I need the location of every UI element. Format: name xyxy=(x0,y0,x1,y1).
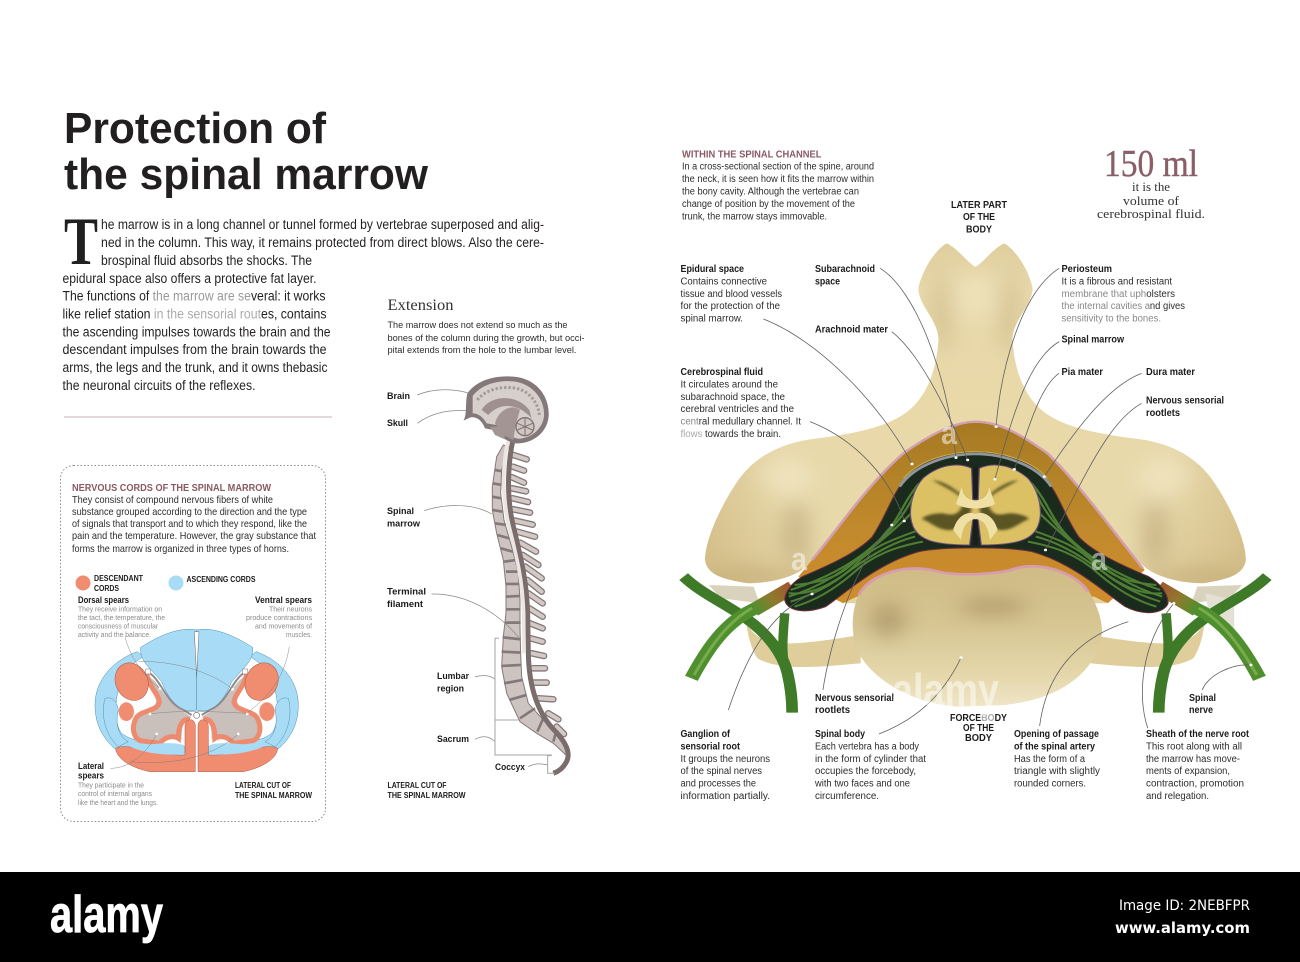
legend: ASCENDING CORDS xyxy=(186,575,256,584)
website: www.alamy.com xyxy=(1115,919,1250,937)
label: cerebrospinal fluid: flows towards the brain. xyxy=(680,429,781,440)
within the spinal channel text: the bony cavity. Although the vertebrae can xyxy=(682,186,859,198)
callout: 150 ml: volume of xyxy=(1123,193,1180,208)
intro text block: he marrow is in a long channel or tunnel formed by vertebrae superposed and alig- xyxy=(101,217,544,232)
label: lateral spears: spears xyxy=(78,770,104,780)
label: ganglion of sensorial root: and processes the xyxy=(680,778,756,790)
watermark over illustration: a xyxy=(791,541,807,577)
label: cerebrospinal fluid: central medullary channel. It xyxy=(680,416,801,428)
label: spinal marrow: Spinal marrow xyxy=(1062,334,1124,346)
spine labels: Lumbar xyxy=(437,671,469,682)
labels: left column upper xyxy=(680,264,782,324)
spine leader lines xyxy=(417,390,555,773)
label: spinal nerve: Spinal xyxy=(1189,693,1216,704)
spine caption xyxy=(388,781,466,800)
label: dorsal spears: consciousness of muscular xyxy=(78,624,159,630)
label: arachnoid mater: Arachnoid mater xyxy=(815,324,888,336)
spine labels: Spinal xyxy=(387,506,414,517)
label: nervous sensorial rootlets right: Nervous sensorial xyxy=(1146,396,1224,406)
label: sheath of the nerve root xyxy=(1146,729,1250,802)
watermark over illustration: a xyxy=(1091,541,1107,577)
label: periosteum: membrane that upholsters xyxy=(1062,289,1175,300)
label: ganglion of sensorial root xyxy=(680,729,770,802)
callout: 150 ml xyxy=(1097,143,1205,221)
watermark over illustration: a xyxy=(941,415,957,451)
bone shading xyxy=(705,273,1246,586)
label: spinal body: circumference. xyxy=(815,791,879,802)
label: lateral spears: They participate in the xyxy=(78,782,144,790)
watermark over illustration xyxy=(791,415,1107,716)
label: forcebody of the body xyxy=(950,713,1007,744)
spine labels: Sacrum xyxy=(437,734,469,745)
vertebral column xyxy=(492,445,568,755)
illustration: vertebra cross-section xyxy=(684,243,1267,734)
labels: left column upper: Contains connective xyxy=(680,276,767,288)
label: ganglion of sensorial root: of the spinal nerves xyxy=(680,766,762,777)
spinal nerves xyxy=(684,577,1267,713)
bone: lamina, transverse and spinous processes xyxy=(705,243,1246,603)
label: dorsal spears: activity and the balance. xyxy=(78,632,151,639)
legend: DESCENDANT xyxy=(94,574,143,583)
panel description: substance grouped according to the direction and the type xyxy=(72,506,307,518)
panel heading: NERVOUS CORDS OF THE SPINAL MARROW xyxy=(72,483,272,494)
legend: CORDS xyxy=(94,584,120,593)
intro text block: descendant impulses from the brain towards the xyxy=(62,342,326,357)
later part of the body label: LATER PART xyxy=(951,200,1007,211)
label: opening of passage of the spinal artery: triangle with slightly xyxy=(1014,766,1100,777)
central commissure xyxy=(956,487,995,508)
spine labels: Terminal xyxy=(387,586,426,598)
label: cerebrospinal fluid: It circulates around the xyxy=(680,380,778,390)
label: spinal nerve: nerve xyxy=(1189,705,1213,716)
spine labels: filament xyxy=(387,599,424,610)
arachnoid layers xyxy=(900,454,1051,487)
intro text block: The functions of the marrow are several: it works xyxy=(62,288,326,304)
label: lateral spears: control of internal organs xyxy=(78,791,152,798)
intro text block: T xyxy=(64,203,98,279)
label: spinal body: occupies the forcebody, xyxy=(815,766,916,777)
title: the spinal marrow xyxy=(64,150,429,199)
label: sheath of the nerve root: ments of expansion, xyxy=(1146,766,1230,777)
labels: left column upper: Epidural space xyxy=(680,264,744,275)
label: ventral spears: produce contractions xyxy=(246,615,313,622)
spinal cord xyxy=(504,438,568,773)
label: cerebrospinal fluid: cerebral ventricles and the xyxy=(680,404,794,415)
label: subarachnoid space: Subarachnoid xyxy=(815,264,875,275)
intro text block: ned in the column. This way, it remains protected from direct blows. Also the cere- xyxy=(101,235,544,250)
label: dorsal spears: Dorsal spears xyxy=(78,595,129,605)
label: spinal body: Spinal body xyxy=(815,729,865,740)
label: spinal body: Each vertebra has a body xyxy=(815,742,919,752)
extension text block: Extension xyxy=(388,297,454,314)
label: spinal body xyxy=(814,729,926,802)
label: cerebrospinal fluid: Cerebrospinal fluid xyxy=(680,367,763,378)
label: lateral spears: like the heart and the lungs. xyxy=(78,800,158,807)
panel description: pain and the temperature. However, the gray substance that xyxy=(72,530,316,542)
title: Protection of xyxy=(64,104,326,153)
cross-section diagram xyxy=(95,629,298,772)
legend xyxy=(76,574,256,593)
label: sheath of the nerve root: the marrow has move- xyxy=(1146,754,1240,765)
intro text block: arms, the legs and the trunk, and it owns thebasic xyxy=(62,360,328,375)
label: subarachnoid space: space xyxy=(815,276,840,288)
label: nervous sensorial rootlets lower: rootlets xyxy=(815,705,850,716)
dura outline xyxy=(812,422,1143,568)
label: ganglion of sensorial root: It groups the neurons xyxy=(680,754,770,765)
later part of the body label: OF THE xyxy=(963,212,995,223)
diagram caption: LATERAL CUT OF xyxy=(235,781,291,790)
label: ganglion of sensorial root: sensorial root xyxy=(680,742,741,752)
label: ventral spears xyxy=(246,595,313,639)
label: ventral spears: and movements of xyxy=(255,624,312,630)
epidural fat xyxy=(798,422,1145,603)
spine labels: Coccyx xyxy=(495,762,526,773)
spine labels: Brain xyxy=(387,391,410,402)
label: nervous sensorial rootlets right: rootlets xyxy=(1146,408,1180,419)
grey matter xyxy=(922,480,1029,530)
labels: left column upper: spinal marrow. xyxy=(680,314,743,324)
callout: 150 ml: cerebrospinal fluid. xyxy=(1097,206,1205,221)
label: forcebody of the body: FORCEBODY xyxy=(950,713,1007,724)
within the spinal channel text: WITHIN THE SPINAL CHANNEL xyxy=(682,150,822,160)
extension text block xyxy=(388,297,584,356)
label: sheath of the nerve root: and relegation. xyxy=(1146,791,1209,802)
label: nervous sensorial rootlets lower xyxy=(815,693,894,716)
intro text block xyxy=(62,203,544,393)
spinous processes xyxy=(512,455,564,734)
label: ganglion of sensorial root: information partially. xyxy=(680,791,770,802)
label: opening of passage of the spinal artery: of the spinal artery xyxy=(1014,742,1095,752)
label: sheath of the nerve root: Sheath of the nerve root xyxy=(1146,729,1250,740)
within the spinal channel text: trunk, the marrow stays immovable. xyxy=(682,212,827,222)
label: spinal body: in the form of cylinder that xyxy=(815,754,926,765)
within the spinal channel text: the neck, it is seen how it fits the marrow within xyxy=(682,174,874,185)
label: dorsal spears: They receive information on xyxy=(78,606,162,614)
panel description: They consist of compound nervous fibers of white xyxy=(72,494,273,506)
body shading xyxy=(870,597,1028,638)
extension text block: The marrow does not extend so much as the xyxy=(388,320,568,331)
nerve rootlets xyxy=(789,483,1162,607)
label: opening of passage of the spinal artery: rounded corners. xyxy=(1014,778,1086,790)
label: ventral spears: Ventral spears xyxy=(255,595,312,605)
label: nervous sensorial rootlets right xyxy=(1146,396,1224,419)
label: spinal nerve xyxy=(1189,693,1216,716)
panel description: forms the marrow is organized in three types of horns. xyxy=(72,543,289,555)
diagram caption: THE SPINAL MARROW xyxy=(235,791,312,800)
label: cerebrospinal fluid: subarachnoid space, the xyxy=(680,392,785,403)
callout: 150 ml: 150 ml xyxy=(1104,143,1198,185)
label: periosteum: Periosteum xyxy=(1062,264,1112,275)
spine labels: Skull xyxy=(387,418,408,429)
panel description xyxy=(72,494,316,555)
later part of the body label xyxy=(951,200,1007,236)
label: periosteum: sensitivity to the bones. xyxy=(1062,314,1161,324)
labels: left column upper: for the protection of the xyxy=(680,301,780,312)
label: periosteum: It is a fibrous and resistant xyxy=(1062,276,1172,288)
spine labels: region xyxy=(437,684,464,694)
leader lines xyxy=(728,268,1251,734)
label: sheath of the nerve root: contraction, promotion xyxy=(1146,778,1244,790)
title xyxy=(64,104,429,199)
extension text block: bones of the column during the growth, but occi- xyxy=(388,333,584,344)
intro text block: the ascending impulses towards the brain and the xyxy=(62,324,330,340)
label: periosteum xyxy=(1062,264,1185,324)
label: pia mater: Pia mater xyxy=(1062,367,1103,378)
intro text block: epidural space also offers a protective fat layer. xyxy=(62,271,316,286)
label: dura mater: Dura mater xyxy=(1146,367,1195,378)
label: forcebody of the body: BODY xyxy=(965,733,992,744)
watermark over illustration: alamy xyxy=(892,664,999,716)
label: nervous sensorial rootlets lower: Nervous sensorial xyxy=(815,693,894,704)
label: opening of passage of the spinal artery xyxy=(1014,729,1100,790)
meningeal sac and root pods xyxy=(785,453,1168,613)
label: cerebrospinal fluid xyxy=(680,367,801,440)
label: dorsal spears xyxy=(78,595,165,639)
within the spinal channel text xyxy=(682,150,874,222)
vertebral body xyxy=(853,566,1102,707)
body rim xyxy=(859,566,1088,595)
label: lateral spears: Lateral xyxy=(78,761,104,771)
intro text block: brospinal fluid absorbs the shocks. The xyxy=(101,253,312,268)
intro text block: like relief station in the sensorial routes, contains xyxy=(62,306,327,322)
within the spinal channel text: In a cross-sectional section of the spine, around xyxy=(682,162,874,172)
panel: nervous cords of the spinal marrow xyxy=(60,466,326,822)
chart: lateral cut of the spine xyxy=(417,376,568,773)
pedicle bars behind xyxy=(709,585,1242,667)
spine caption: THE SPINAL MARROW xyxy=(388,791,466,800)
later part of the body label: BODY xyxy=(966,224,992,236)
label: opening of passage of the spinal artery: Has the form of a xyxy=(1014,754,1085,765)
label: opening of passage of the spinal artery: Opening of passage xyxy=(1014,729,1099,740)
bottom black bar xyxy=(0,872,1300,962)
label: dorsal spears: the tact, the temperature, the xyxy=(78,615,165,622)
spinal cord section xyxy=(911,465,1040,545)
label: spinal body: with two faces and one xyxy=(814,778,910,790)
within the spinal channel text: change of position by the movement of the xyxy=(682,199,855,210)
intro text block: the neuronal circuits of the reflexes. xyxy=(62,378,256,393)
spine labels: marrow xyxy=(387,518,421,530)
label: forcebody of the body: OF THE xyxy=(963,723,994,734)
skull and brain xyxy=(463,376,549,443)
label: sheath of the nerve root: This root along with all xyxy=(1146,742,1242,752)
diagram caption xyxy=(235,781,312,800)
image id: Image ID: 2NEBFPR xyxy=(1119,898,1250,914)
label: ventral spears: muscles. xyxy=(286,632,312,639)
label: subarachnoid space xyxy=(815,264,875,288)
spine labels xyxy=(387,391,526,773)
intervertebral discs xyxy=(492,470,557,742)
alamy logo: alamy xyxy=(50,886,163,944)
label: periosteum: the internal cavities and gives xyxy=(1062,301,1185,312)
label: lateral spears xyxy=(78,761,158,807)
label: ventral spears: Their neurons xyxy=(269,606,312,614)
panel description: of signals that transport and to which they respond, like the xyxy=(72,518,307,530)
label: ganglion of sensorial root: Ganglion of xyxy=(680,729,731,740)
pointer dots xyxy=(810,425,1252,666)
spine caption: LATERAL CUT OF xyxy=(388,781,447,790)
callout: 150 ml: it is the xyxy=(1132,179,1170,194)
extension text block: pital extends from the hole to the lumbar level. xyxy=(388,345,576,356)
labels: left column upper: tissue and blood vessels xyxy=(680,289,782,300)
